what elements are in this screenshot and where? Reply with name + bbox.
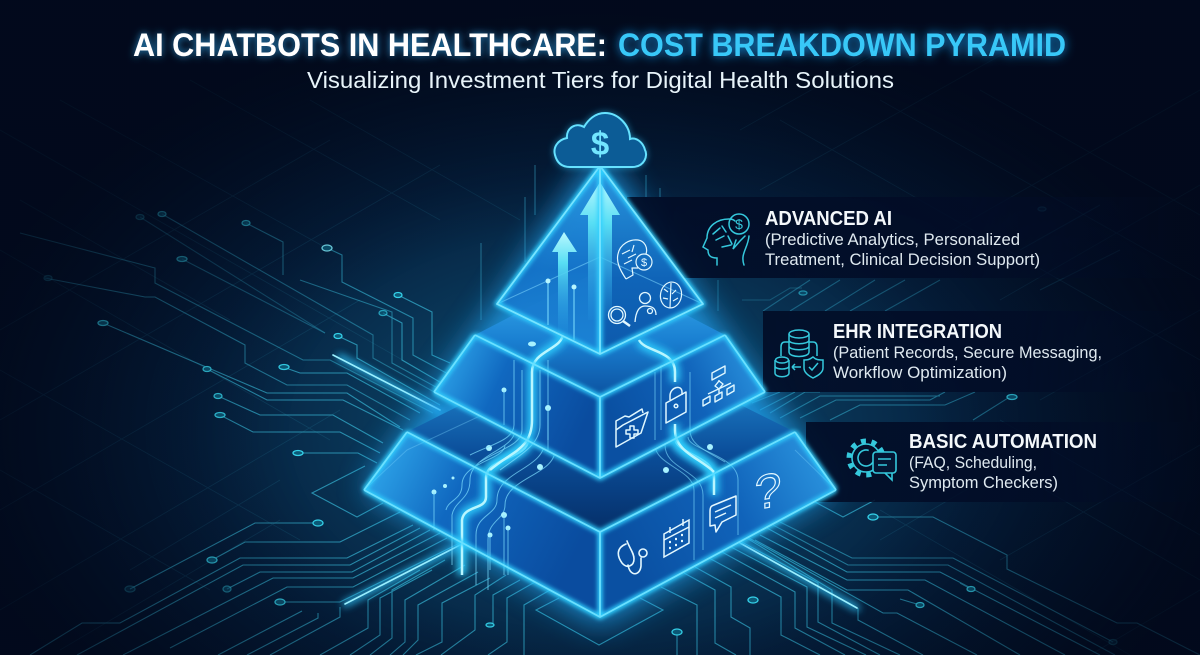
middle tier nodes xyxy=(502,342,551,411)
subtitle: Visualizing Investment Tiers for Digital Health Solutions xyxy=(307,67,894,93)
title xyxy=(133,27,1066,63)
icon: calendar xyxy=(664,519,689,557)
label: basic automation: BASIC AUTOMATION xyxy=(909,431,1097,453)
label: basic automation: (FAQ, Scheduling, xyxy=(909,453,1037,472)
circuit river: lower left xyxy=(446,430,555,590)
icon: padlock xyxy=(666,387,686,423)
label: EHR integration: (Patient Records, Secure Messaging, xyxy=(833,343,1102,362)
panel: advanced AI background xyxy=(627,197,1200,278)
icon: chat bubble xyxy=(710,496,736,532)
icon: question mark: ? xyxy=(755,463,781,521)
icon: cloud with dollar: $ xyxy=(591,125,609,162)
icon: workflow chart xyxy=(703,366,734,406)
circuit traces left xyxy=(20,214,663,655)
pyramid tier: basic automation xyxy=(364,335,836,617)
circuit traces right xyxy=(661,205,1200,655)
pyramid tier: advanced AI xyxy=(497,166,703,354)
panel: basic automation background xyxy=(806,422,1200,502)
icon: stethoscope xyxy=(618,541,647,574)
label: advanced AI: Treatment, Clinical Decision Support) xyxy=(765,250,1040,269)
circuit river: lower right xyxy=(655,437,738,560)
label: EHR integration: EHR INTEGRATION xyxy=(833,321,1002,343)
label: advanced AI: ADVANCED AI xyxy=(765,208,892,230)
icon: head with brain and dollar xyxy=(703,214,749,265)
label: EHR integration xyxy=(833,321,1102,382)
circuit river: middle right xyxy=(639,340,725,472)
label: advanced AI xyxy=(765,208,1040,269)
small up arrow xyxy=(552,232,577,335)
label: EHR integration: Workflow Optimization) xyxy=(833,363,1007,382)
icon: magnifier xyxy=(608,306,630,326)
data lines xyxy=(546,278,576,340)
icon: cloud with dollar xyxy=(554,113,646,167)
lower tier nodes xyxy=(432,444,713,538)
title: COST BREAKDOWN PYRAMID xyxy=(618,27,1066,63)
icon: head with brain and dollar: $ xyxy=(735,216,743,232)
icon: clinician xyxy=(635,292,656,322)
circuit nodes xyxy=(44,207,1117,644)
icon: brain with dollar coin: $ xyxy=(641,257,647,269)
label: basic automation xyxy=(909,431,1097,492)
label: basic automation: Symptom Checkers) xyxy=(909,473,1058,492)
icon: medical folder xyxy=(616,409,648,447)
icon: gear and chat xyxy=(849,441,896,480)
pyramid tier: EHR integration xyxy=(434,270,765,478)
panel: EHR integration background xyxy=(763,311,1200,392)
label: advanced AI: (Predictive Analytics, Personalized xyxy=(765,230,1020,249)
icon: brain xyxy=(658,280,684,310)
title: AI CHATBOTS IN HEALTHCARE: xyxy=(133,27,607,63)
icon: database and shield xyxy=(775,330,823,378)
icon: brain with dollar coin xyxy=(617,240,652,279)
pyramid glow xyxy=(364,150,836,625)
circuit river: middle left xyxy=(470,333,563,470)
vertical light lines above pyramid xyxy=(481,165,660,320)
bright trace streaks xyxy=(333,355,857,608)
large up arrow xyxy=(580,182,620,320)
